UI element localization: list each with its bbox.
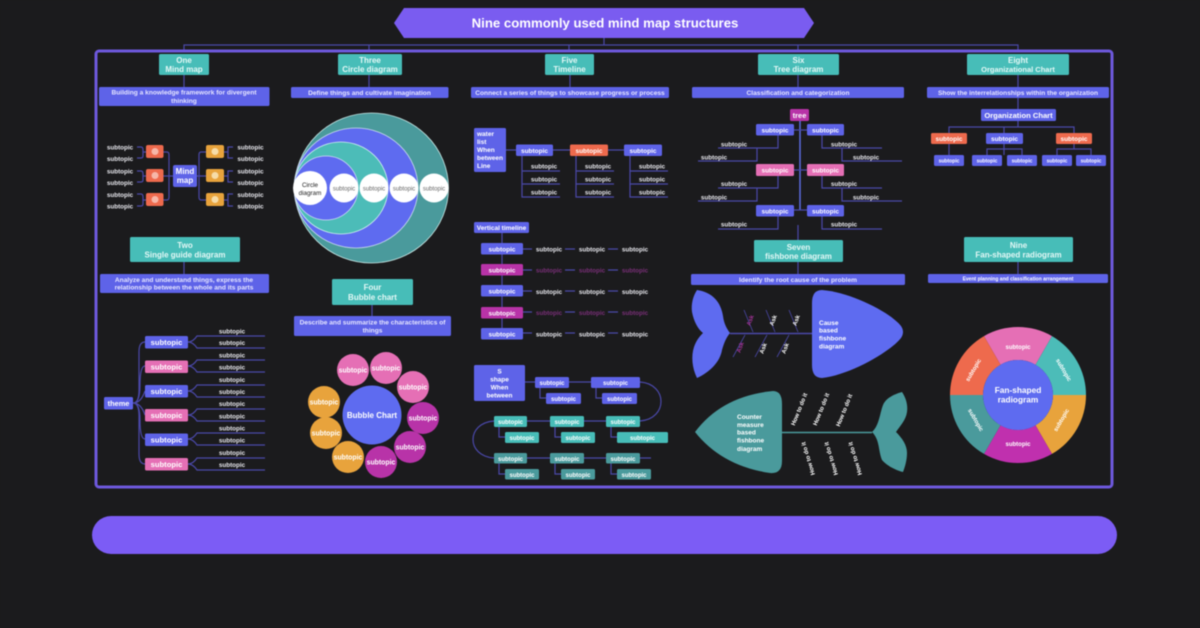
vertical timeline: Vertical timeline — [477, 225, 527, 232]
circle diagram: subtopic — [393, 186, 415, 192]
heading: three: Three — [359, 56, 381, 65]
heading: eight — [967, 54, 1069, 75]
radiogram: radiogram — [998, 394, 1038, 404]
organization chart: subtopic — [977, 158, 998, 164]
heading: nine: Nine — [1010, 241, 1028, 250]
vertical timeline: subtopic — [488, 268, 516, 274]
organization chart: subtopic — [1060, 136, 1088, 143]
bubble chart: subtopic — [372, 366, 401, 372]
tree diagram: subtopic — [812, 208, 839, 216]
horizontal timeline: subtopic — [531, 190, 558, 196]
cause fishbone diagram: diagram — [819, 344, 845, 350]
organization chart: subtopic — [991, 136, 1018, 143]
single guide diagram: subtopic — [151, 338, 182, 347]
vertical timeline: subtopic — [579, 268, 606, 274]
heading: one — [159, 54, 209, 75]
vertical timeline: subtopic — [622, 332, 649, 338]
tree diagram: subtopic — [721, 142, 748, 148]
circle diagram: subtopic — [423, 186, 445, 192]
heading: nine: Fan-shaped radiogram — [975, 250, 1062, 260]
panel: six tree diagram — [692, 54, 904, 240]
mind map diagram: subtopic — [107, 168, 134, 176]
single guide diagram: subtopic — [219, 438, 246, 444]
heading: seven: Seven — [787, 243, 810, 252]
description: one — [99, 87, 270, 106]
s-shape timeline: subtopic — [540, 381, 565, 387]
countermeasure fishbone diagram — [695, 391, 907, 476]
organization chart: subtopic — [1081, 158, 1102, 164]
heading: four — [332, 279, 413, 305]
s-shape timeline: subtopic — [510, 473, 535, 479]
bubble chart: subtopic — [367, 460, 396, 466]
description: six: Classification and categorization — [747, 90, 849, 97]
tree diagram: subtopic — [701, 194, 728, 202]
vertical timeline: subtopic — [536, 246, 563, 254]
tree diagram — [698, 109, 902, 240]
bubble chart — [308, 352, 439, 478]
description: nine: Event planning and classification arrangement — [963, 276, 1074, 282]
vertical timeline: subtopic — [536, 332, 563, 338]
radiogram: subtopic — [1006, 345, 1031, 351]
s-shape timeline: subtopic — [630, 436, 656, 442]
horizontal timeline: between — [477, 155, 503, 162]
mind map diagram: subtopic — [237, 144, 264, 152]
cause fishbone diagram: based — [819, 328, 838, 334]
horizontal timeline: subtopic — [585, 176, 612, 184]
horizontal timeline: subtopic — [585, 164, 612, 170]
heading: eight: Eight — [1008, 56, 1028, 65]
single guide diagram: subtopic — [219, 414, 246, 420]
s-shape timeline: subtopic — [554, 420, 580, 426]
s-shape timeline: subtopic — [610, 457, 636, 463]
heading: one: Mind map — [165, 65, 203, 74]
bottom bar — [92, 516, 1117, 554]
heading: four: Four — [364, 283, 381, 292]
cause fishbone diagram: fishbone — [819, 336, 846, 342]
description: three — [291, 87, 448, 98]
horizontal timeline: When — [477, 147, 495, 154]
single guide diagram: subtopic — [151, 411, 182, 420]
single guide diagram: subtopic — [219, 426, 246, 432]
panel: three circle diagram — [291, 54, 448, 263]
horizontal timeline: subtopic — [521, 148, 548, 155]
organization chart: subtopic — [935, 136, 963, 143]
vertical timeline — [474, 222, 649, 340]
s-shape timeline: subtopic — [566, 473, 591, 479]
s-shape timeline: subtopic — [566, 436, 591, 442]
s-shape timeline — [473, 365, 668, 480]
mind map diagram: Mind — [176, 167, 194, 176]
mind map diagram: subtopic — [107, 204, 134, 210]
single guide diagram: subtopic — [219, 364, 246, 372]
s-shape timeline: subtopic — [603, 381, 629, 387]
panel: two single guide diagram — [100, 237, 269, 470]
horizontal timeline: list — [477, 139, 487, 146]
mind map diagram: subtopic — [107, 156, 134, 163]
countermeasure fishbone diagram: How to do it — [824, 441, 840, 476]
main frame — [96, 51, 1112, 487]
horizontal timeline — [474, 128, 668, 197]
vertical timeline: subtopic — [536, 268, 563, 274]
cause fishbone diagram — [692, 290, 903, 378]
heading: one: One — [176, 56, 192, 65]
cause fishbone diagram: Ask — [746, 314, 756, 327]
heading: six: Six — [792, 56, 805, 65]
vertical timeline: subtopic — [488, 310, 516, 318]
circle diagram: subtopic — [333, 186, 355, 192]
countermeasure fishbone diagram: fishbone — [737, 438, 764, 444]
cause fishbone diagram: Ask — [769, 314, 779, 327]
description: eight — [927, 87, 1109, 98]
s-shape timeline: subtopic — [498, 457, 524, 463]
description: five — [471, 87, 669, 98]
heading: six — [758, 54, 839, 75]
radiogram: subtopic — [965, 358, 983, 383]
s-shape timeline: subtopic — [607, 397, 633, 403]
horizontal timeline: subtopic — [575, 148, 603, 155]
countermeasure fishbone diagram: How to do it — [813, 393, 831, 427]
bubble chart: subtopic — [409, 416, 438, 422]
cause fishbone diagram: Ask — [781, 342, 791, 355]
single guide diagram: subtopic — [219, 352, 246, 360]
mind map diagram: subtopic — [107, 180, 134, 187]
single guide diagram: subtopic — [219, 340, 246, 347]
panel: four bubble chart — [294, 279, 451, 478]
bubble chart: subtopic — [334, 454, 363, 462]
circle diagram: Circle — [302, 182, 319, 189]
single guide diagram: subtopic — [151, 460, 182, 469]
vertical timeline: subtopic — [579, 310, 606, 317]
countermeasure fishbone diagram: How to do it — [836, 394, 854, 428]
horizontal timeline: Line — [477, 163, 491, 170]
description: two: relationship between the whole and its parts — [115, 284, 254, 292]
single guide diagram: subtopic — [219, 462, 246, 469]
heading: seven — [754, 240, 843, 262]
description: six — [692, 87, 904, 98]
s-shape timeline: shape — [490, 376, 509, 384]
mind map diagram — [107, 144, 264, 210]
description: seven: Identify the root cause of the problem — [739, 277, 857, 284]
bubble chart: subtopic — [310, 400, 339, 406]
heading: two: Two — [177, 241, 193, 250]
horizontal timeline: subtopic — [585, 190, 612, 196]
countermeasure fishbone diagram: measure — [737, 422, 764, 429]
radiogram: subtopic — [1054, 358, 1072, 383]
single guide diagram: subtopic — [219, 389, 246, 396]
horizontal timeline: water — [476, 131, 494, 138]
tree diagram: subtopic — [831, 181, 858, 188]
description: three: Define things and cultivate imagination — [308, 90, 431, 97]
description: five: Connect a series of things to showcase progress or process — [475, 90, 665, 97]
single guide diagram: subtopic — [219, 450, 246, 457]
heading: five — [545, 54, 594, 75]
bubble chart: subtopic — [312, 430, 341, 438]
description: seven — [691, 274, 905, 285]
countermeasure fishbone diagram: How to do it — [791, 393, 809, 427]
single guide diagram: subtopic — [151, 362, 182, 372]
bubble chart: subtopic — [396, 444, 425, 452]
description: nine — [928, 274, 1108, 283]
heading: eight: Organizational Chart — [981, 65, 1055, 74]
tree diagram: subtopic — [761, 208, 789, 216]
mind map diagram: subtopic — [237, 168, 264, 176]
circle diagram: subtopic — [363, 186, 385, 192]
single guide diagram: subtopic — [151, 436, 182, 444]
description: one: Building a knowledge framework for divergent — [111, 90, 257, 96]
radiogram: Fan-shaped — [995, 385, 1041, 395]
s-shape timeline: subtopic — [551, 397, 577, 403]
circle diagram — [293, 113, 448, 263]
organization chart: subtopic — [939, 158, 960, 164]
bubble chart: subtopic — [399, 384, 428, 392]
heading: six: Tree diagram — [774, 65, 823, 74]
tree diagram: subtopic — [812, 128, 839, 134]
single guide diagram: subtopic — [219, 377, 246, 384]
s-shape timeline: S — [497, 368, 502, 376]
heading: five: Timeline — [553, 65, 586, 74]
vertical timeline: subtopic — [622, 246, 649, 254]
tree diagram: subtopic — [853, 154, 880, 162]
heading: four: Bubble chart — [348, 293, 397, 302]
vertical timeline: subtopic — [536, 310, 563, 317]
vertical timeline: subtopic — [622, 289, 649, 296]
description: four: Describe and summarize the characteristics of — [300, 320, 446, 326]
s-shape timeline: subtopic — [510, 436, 535, 442]
vertical timeline: subtopic — [622, 310, 649, 317]
panel: eight organizational chart — [927, 54, 1109, 166]
s-shape timeline: subtopic — [498, 420, 524, 426]
organization chart — [931, 109, 1106, 166]
heading: nine — [964, 237, 1073, 262]
vertical timeline: subtopic — [579, 289, 606, 296]
heading: three: Circle diagram — [342, 65, 398, 74]
cause fishbone diagram: Cause — [819, 320, 839, 327]
cause fishbone diagram: Ask — [736, 341, 746, 354]
single guide diagram: theme — [108, 399, 129, 408]
tree diagram: subtopic — [761, 168, 789, 174]
horizontal timeline: subtopic — [531, 176, 558, 184]
vertical timeline: subtopic — [488, 246, 516, 254]
panel: one mind map — [99, 54, 270, 210]
mind map diagram: subtopic — [237, 192, 264, 199]
organization chart: Organization Chart — [984, 111, 1053, 120]
description: two — [100, 274, 269, 293]
tree diagram: subtopic — [761, 128, 789, 134]
panel: five timeline — [471, 54, 669, 480]
countermeasure fishbone diagram: Counter — [737, 414, 762, 421]
single guide diagram: subtopic — [219, 328, 246, 336]
tree diagram: subtopic — [721, 181, 748, 188]
radiogram — [950, 327, 1086, 463]
heading: seven: fishbone diagram — [765, 252, 832, 261]
vertical timeline: subtopic — [579, 246, 606, 254]
countermeasure fishbone diagram: How to do it — [801, 441, 817, 476]
radiogram: subtopic — [1053, 408, 1071, 433]
cause fishbone diagram: Ask — [759, 342, 769, 355]
tree diagram: subtopic — [831, 142, 858, 148]
panel: seven fishbone diagram — [691, 240, 907, 476]
heading: five: Five — [561, 56, 578, 65]
s-shape timeline: When — [491, 384, 508, 392]
bubble chart: Bubble Chart — [347, 411, 397, 420]
horizontal timeline: subtopic — [531, 164, 558, 170]
tree diagram: subtopic — [812, 168, 839, 174]
s-shape timeline: subtopic — [622, 473, 647, 479]
radiogram: subtopic — [1006, 442, 1031, 448]
mind map diagram: subtopic — [107, 192, 134, 199]
s-shape timeline: between — [486, 392, 513, 400]
vertical timeline: subtopic — [488, 288, 516, 296]
tree diagram: subtopic — [701, 154, 728, 162]
mind map diagram: map — [177, 176, 193, 185]
vertical timeline: subtopic — [488, 332, 516, 338]
circle diagram: diagram — [299, 190, 321, 197]
single guide diagram: subtopic — [219, 401, 246, 408]
horizontal timeline: subtopic — [639, 164, 666, 170]
description: four: things — [363, 328, 383, 334]
title banner — [394, 8, 814, 38]
vertical timeline: subtopic — [536, 289, 563, 296]
vertical timeline: subtopic — [579, 332, 606, 338]
tree diagram: subtopic — [721, 222, 748, 228]
description: one: thinking — [171, 98, 197, 105]
single guide diagram — [104, 328, 265, 470]
s-shape timeline: subtopic — [610, 420, 636, 426]
countermeasure fishbone diagram: How to do it — [848, 441, 864, 476]
organization chart: subtopic — [1012, 158, 1033, 164]
description: two: Analyze and understand things, express the — [115, 277, 253, 284]
tree diagram: subtopic — [853, 194, 880, 202]
mind map diagram: subtopic — [237, 180, 264, 187]
heading: three — [338, 54, 402, 75]
title banner: Nine commonly used mind map structures — [472, 16, 738, 30]
description: four — [294, 316, 451, 336]
organization chart: subtopic — [1047, 158, 1068, 164]
radiogram: subtopic — [966, 408, 984, 433]
cause fishbone diagram: Ask — [792, 314, 802, 327]
panel: nine fan-shaped radiogram — [928, 237, 1108, 463]
mind map diagram: subtopic — [237, 156, 264, 163]
bubble chart: subtopic — [339, 368, 368, 374]
mind map diagram: subtopic — [107, 144, 134, 152]
single guide diagram: subtopic — [151, 387, 182, 396]
heading: two: Single guide diagram — [145, 250, 225, 260]
tree diagram: tree — [793, 111, 806, 120]
mind map diagram: subtopic — [237, 204, 264, 210]
horizontal timeline: subtopic — [629, 148, 657, 155]
tree diagram: subtopic — [831, 222, 858, 228]
horizontal timeline: subtopic — [639, 190, 666, 196]
vertical timeline: subtopic — [622, 268, 649, 274]
heading: two — [130, 237, 240, 262]
s-shape timeline: subtopic — [554, 457, 580, 463]
description: eight: Show the interrelationships within the organization — [938, 90, 1098, 97]
horizontal timeline: subtopic — [639, 176, 666, 184]
countermeasure fishbone diagram: based — [737, 430, 756, 436]
countermeasure fishbone diagram: diagram — [737, 446, 763, 453]
